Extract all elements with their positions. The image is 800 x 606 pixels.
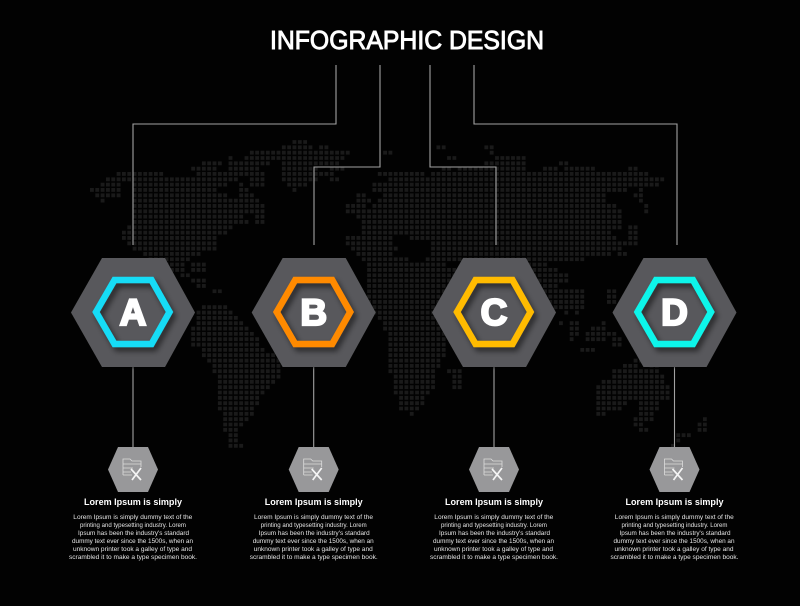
heading D: Lorem Ipsum is simply (626, 497, 724, 507)
body A: printing and typesetting industry. Lorem (80, 523, 186, 529)
body D: scrambled it to make a type specimen book. (610, 555, 739, 561)
letter C: C (481, 292, 507, 333)
body C: dummy text ever since the 1500s, when an (433, 539, 554, 545)
heading A: Lorem Ipsum is simply (84, 497, 182, 507)
ring A (96, 280, 170, 344)
body B: Lorem Ipsum is simply dummy text of the (254, 515, 374, 521)
body A: Lorem Ipsum is simply dummy text of the (73, 515, 193, 521)
connector to B (314, 65, 380, 245)
body B: Ipsum has been the industry's standard (259, 531, 370, 537)
heading C: Lorem Ipsum is simply (445, 497, 543, 507)
body C: scrambled it to make a type specimen book. (430, 555, 558, 561)
stem A (132, 366, 134, 448)
small hexagon A (108, 447, 158, 492)
icon B (304, 459, 322, 480)
column A (69, 258, 197, 561)
body D: Ipsum has been the industry's standard (620, 531, 730, 537)
world map dotted (90, 142, 708, 446)
heading B: Lorem Ipsum is simply (265, 497, 363, 507)
body A (69, 515, 197, 561)
hexagon D (612, 258, 736, 367)
body C: unknown printer took a galley of type and (434, 547, 553, 553)
body C: Lorem Ipsum is simply dummy text of the (434, 515, 554, 521)
icon A (123, 459, 141, 480)
small hexagon B (289, 447, 339, 492)
body D: unknown printer took a galley of type and (614, 547, 734, 553)
body A: scrambled it to make a type specimen book. (69, 555, 197, 561)
letter D: D (661, 292, 688, 333)
column D (610, 258, 739, 561)
ring D (638, 280, 711, 344)
letter B: B (300, 292, 327, 333)
body C: printing and typesetting industry. Lorem (441, 523, 547, 529)
ring B (277, 280, 350, 344)
body B (250, 515, 378, 561)
column B (250, 258, 378, 561)
body B: printing and typesetting industry. Lorem (261, 523, 367, 529)
hexagon A (71, 258, 195, 367)
body B: dummy text ever since the 1500s, when an (253, 539, 374, 545)
body C (430, 515, 558, 561)
body A: unknown printer took a galley of type and (73, 547, 192, 553)
connector to D (474, 65, 677, 245)
body D: Lorem Ipsum is simply dummy text of the (615, 515, 735, 521)
small hexagon D (650, 447, 700, 492)
ring C (457, 280, 530, 344)
body A: dummy text ever since the 1500s, when an (72, 539, 193, 545)
hexagon B (252, 258, 376, 367)
letter A: A (120, 292, 146, 333)
small hexagon C (469, 447, 519, 492)
connector to C (430, 65, 496, 245)
body B: unknown printer took a galley of type and (254, 547, 373, 553)
stem B (313, 366, 315, 448)
body D (610, 515, 739, 561)
body D: dummy text ever since the 1500s, when an (614, 539, 734, 545)
icon D (664, 459, 682, 480)
body A: Ipsum has been the industry's standard (78, 531, 189, 537)
connector to A (133, 65, 336, 245)
stem C (493, 366, 495, 448)
body B: scrambled it to make a type specimen book. (250, 555, 378, 561)
hexagon C (432, 258, 556, 367)
column C (430, 258, 558, 561)
stem D (674, 366, 676, 448)
body C: Ipsum has been the industry's standard (439, 531, 550, 537)
body D: printing and typesetting industry. Lorem (622, 523, 728, 529)
title: INFOGRAPHIC DESIGN (270, 27, 544, 55)
icon C (484, 459, 502, 480)
